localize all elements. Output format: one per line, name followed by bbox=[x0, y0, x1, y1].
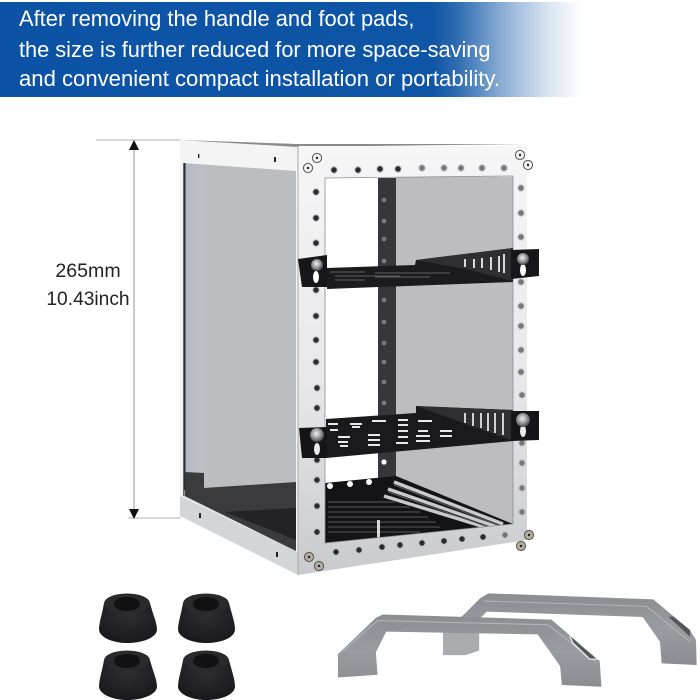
cabinet rails bbox=[384, 482, 503, 528]
cabinet floor bbox=[325, 476, 513, 543]
dimension: height 265mm: 10.43inch bbox=[46, 289, 130, 310]
front handle bbox=[338, 614, 601, 687]
front frame bbox=[298, 146, 527, 575]
dimension: height 265mm: 265mm bbox=[55, 260, 121, 282]
foot pads bbox=[99, 594, 235, 700]
frame holes bbox=[313, 166, 486, 555]
cabinet bbox=[180, 140, 539, 575]
banner text line 1: After removing the handle and foot pads, bbox=[19, 6, 415, 31]
foot pad 2 bbox=[178, 594, 235, 643]
lower shelf bbox=[299, 406, 539, 458]
side panel metal frame bbox=[180, 140, 298, 575]
foot pad 1 bbox=[99, 594, 157, 643]
handles bbox=[338, 593, 697, 687]
side window glass bbox=[183, 163, 296, 551]
dimension: height 265mm bbox=[46, 140, 181, 519]
foot pad 4 bbox=[178, 650, 235, 700]
back handle leg bbox=[443, 632, 479, 655]
header banner bbox=[0, 2, 600, 97]
back handle bbox=[460, 593, 697, 665]
corner screws bbox=[303, 150, 534, 571]
banner text line 3: and convenient compact installation or portability. bbox=[19, 66, 500, 91]
banner text line 2: the size is further reduced for more space-saving bbox=[19, 37, 490, 62]
upper shelf bbox=[298, 248, 539, 289]
rear view through front opening bbox=[325, 177, 513, 543]
foot pad 3 bbox=[99, 650, 157, 700]
